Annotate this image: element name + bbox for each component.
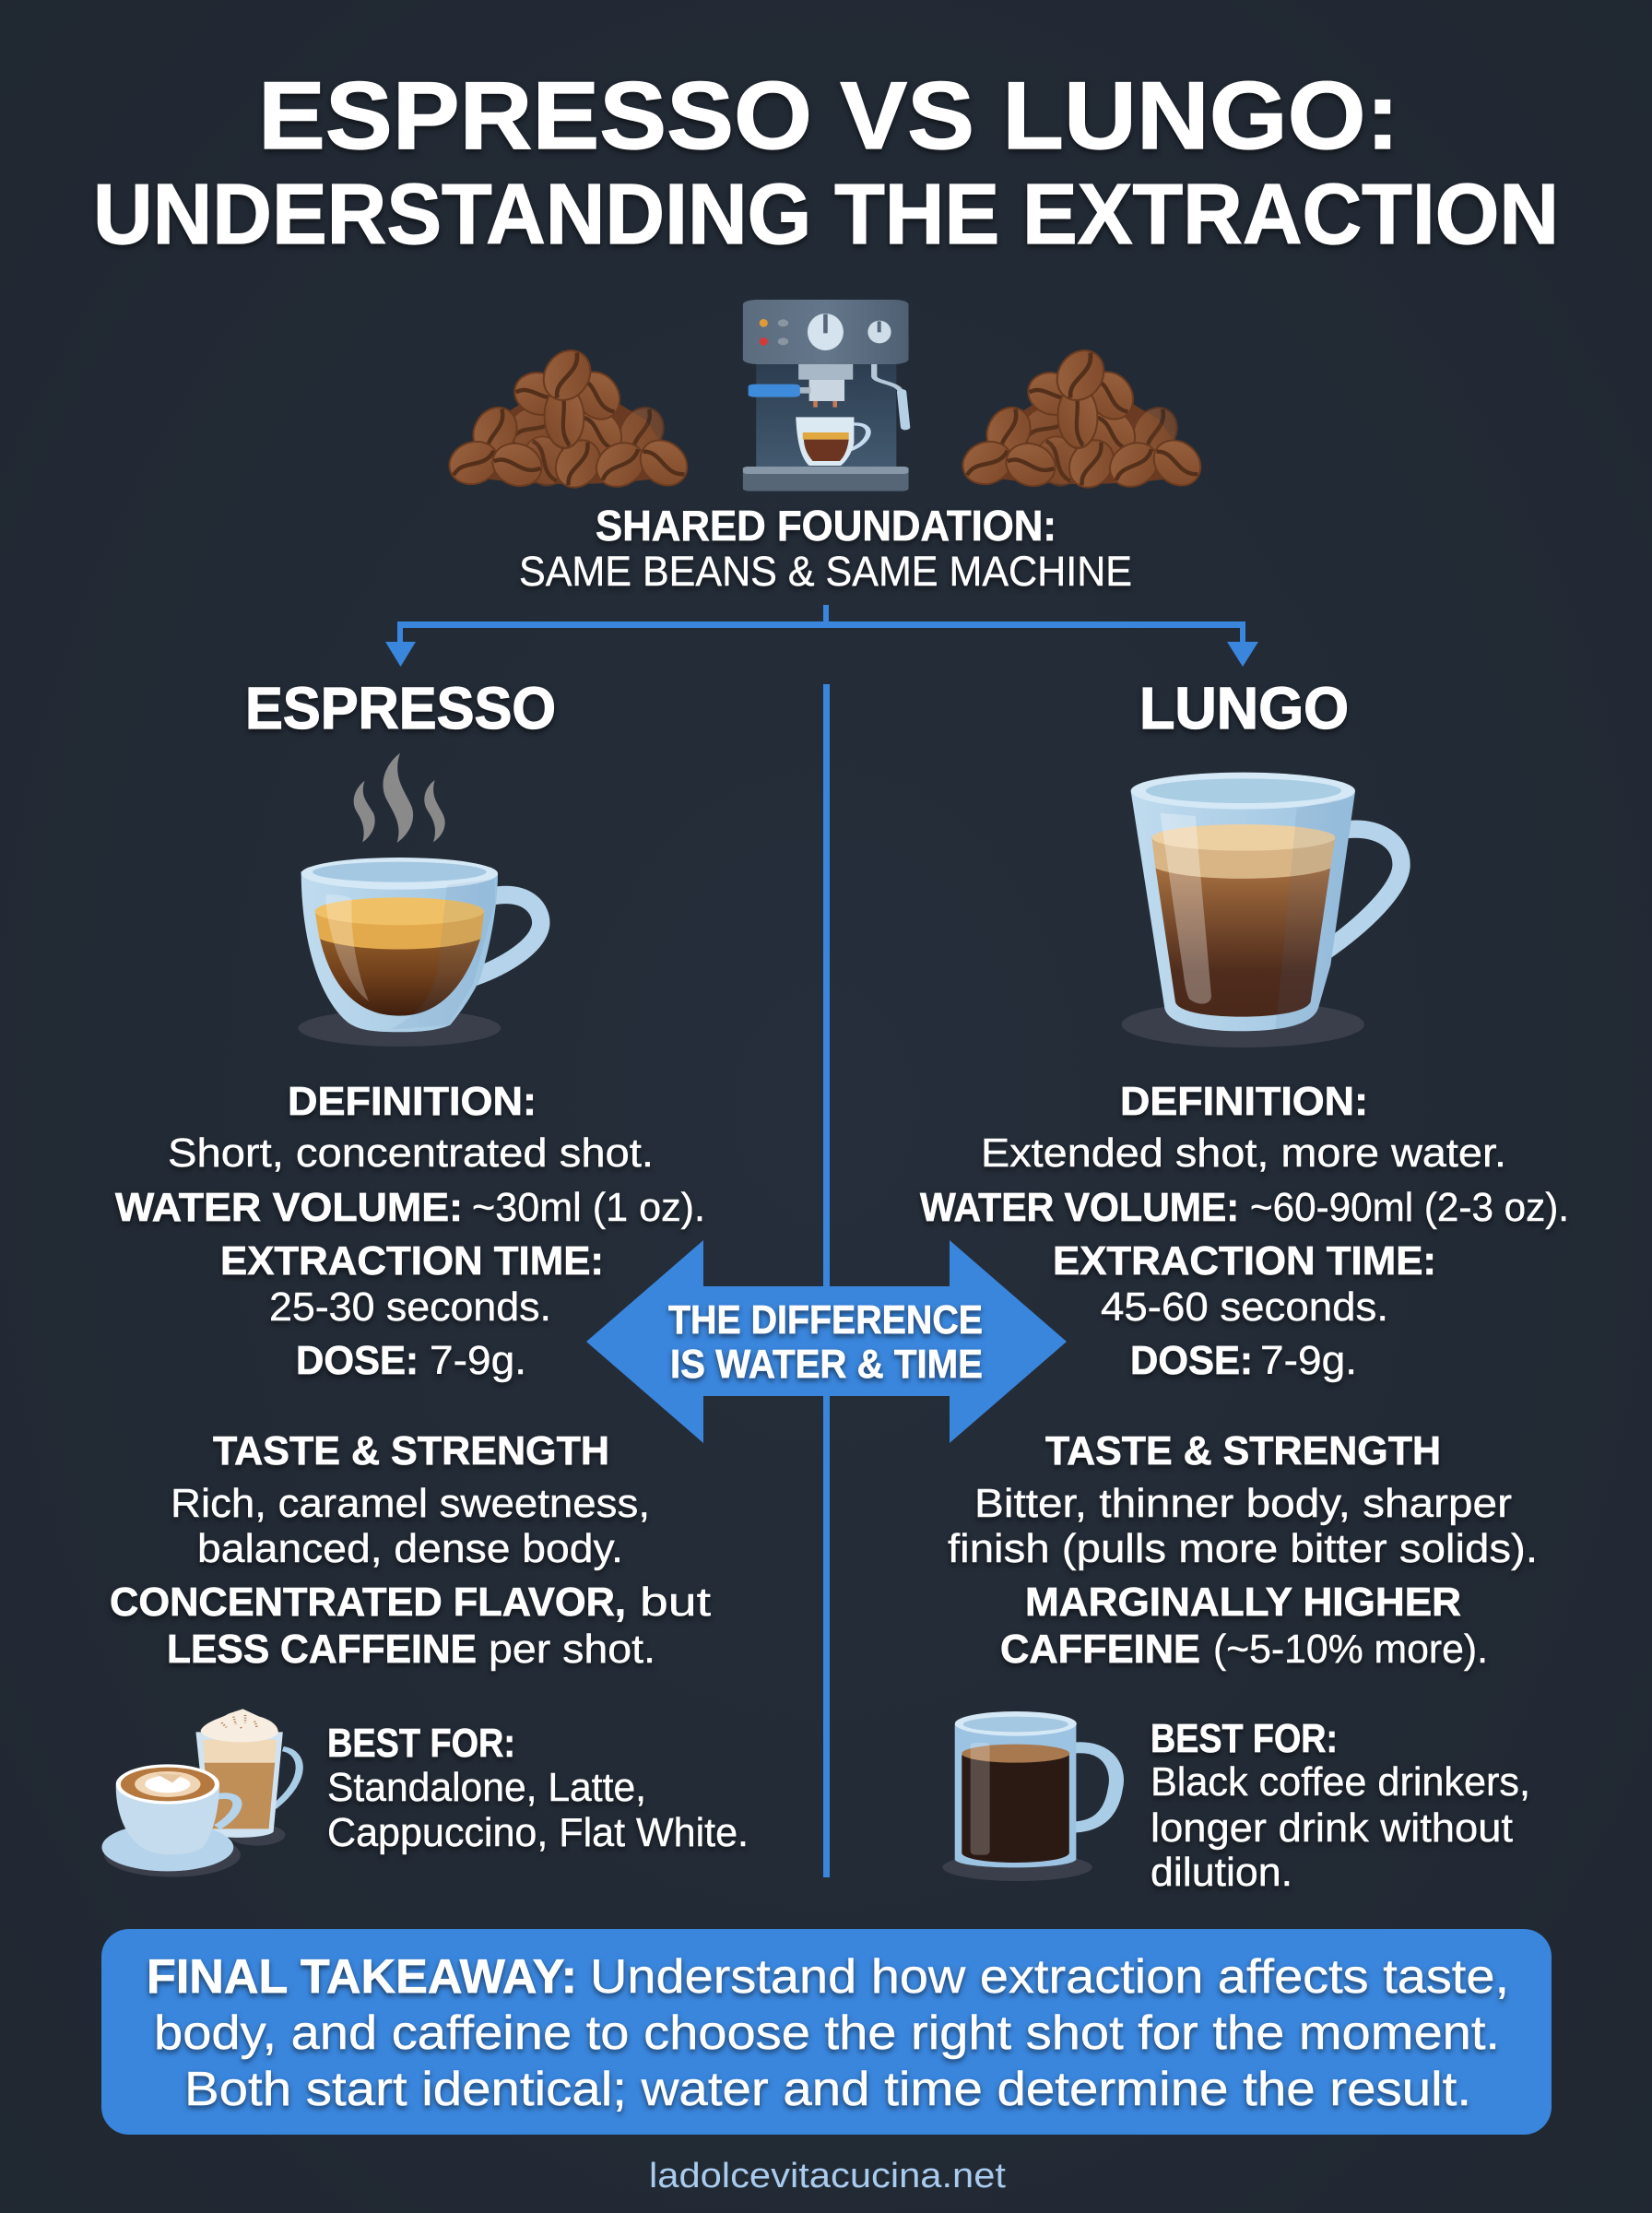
panel: lungo facts xyxy=(920,1079,1569,1672)
panel: lungo facts: MARGINALLY HIGHER xyxy=(1025,1580,1461,1625)
best for: lungo xyxy=(1150,1716,1530,1895)
panel: lungo facts: WATER VOLUME: xyxy=(920,1185,1239,1230)
panel: espresso facts: TASTE & STRENGTH xyxy=(213,1428,609,1473)
best for: lungo: longer drink without xyxy=(1150,1805,1513,1851)
arrow: the difference xyxy=(586,1240,1067,1443)
panel: lungo facts: Extended shot, more water. xyxy=(981,1130,1506,1176)
panel: espresso facts: DOSE: xyxy=(296,1338,419,1383)
panel: final takeaway: Both start identical; water and time determine the result. xyxy=(184,2063,1471,2116)
panel: lungo facts: 7-9g. xyxy=(1260,1338,1357,1383)
icon: espresso cup xyxy=(298,753,541,1047)
panel: lungo facts: EXTRACTION TIME: xyxy=(1053,1238,1436,1284)
heading: lungo: LUNGO xyxy=(1139,675,1349,741)
best for: lungo: dilution. xyxy=(1150,1850,1292,1895)
best for: espresso xyxy=(327,1721,749,1855)
arrow text: IS WATER & TIME xyxy=(670,1342,983,1387)
arrow text: THE DIFFERENCE xyxy=(668,1297,983,1343)
panel: espresso facts xyxy=(110,1079,711,1672)
icon: latte and cappuccino xyxy=(101,1709,300,1877)
panel: espresso facts: EXTRACTION TIME: xyxy=(220,1238,604,1284)
shared foundation text: SHARED FOUNDATION: xyxy=(596,502,1056,550)
best for: lungo: BEST FOR: xyxy=(1150,1716,1338,1761)
panel: lungo facts: (~5-10% more). xyxy=(1213,1627,1488,1672)
panel: final takeaway: Understand how extraction affects taste, xyxy=(590,1950,1509,2004)
best for: espresso: Cappuccino, Flat White. xyxy=(327,1810,749,1855)
best for: espresso: BEST FOR: xyxy=(327,1721,515,1766)
icon: coffee beans right xyxy=(957,341,1210,496)
icon: black coffee mug xyxy=(942,1711,1116,1881)
best for: espresso: Standalone, Latte, xyxy=(327,1765,646,1810)
panel: lungo facts: Bitter, thinner body, sharper xyxy=(974,1481,1512,1526)
panel: espresso facts: 25-30 seconds. xyxy=(269,1284,551,1330)
panel: espresso facts: but xyxy=(640,1580,711,1625)
panel: espresso facts: per shot. xyxy=(489,1627,655,1672)
arrows: split from foundation xyxy=(385,605,1258,667)
icon: espresso machine xyxy=(743,300,909,491)
shared foundation text xyxy=(519,502,1132,595)
footer: ladolcevitacucina.net xyxy=(649,2157,1006,2195)
panel: final takeaway xyxy=(101,1929,1552,2135)
panel: lungo facts: finish (pulls more bitter solids). xyxy=(948,1526,1538,1571)
icon: coffee beans left xyxy=(443,341,696,496)
panel: lungo facts: DOSE: xyxy=(1130,1338,1253,1383)
panel: espresso facts: LESS CAFFEINE xyxy=(167,1627,477,1672)
panel: espresso facts: Short, concentrated shot. xyxy=(168,1130,654,1176)
heading: espresso: ESPRESSO xyxy=(245,675,556,741)
panel: espresso facts: WATER VOLUME: xyxy=(115,1185,463,1230)
title: UNDERSTANDING THE EXTRACTION xyxy=(93,166,1559,262)
title xyxy=(93,63,1559,262)
panel: espresso facts: Rich, caramel sweetness, xyxy=(171,1481,650,1526)
panel: espresso facts: CONCENTRATED FLAVOR, xyxy=(110,1580,626,1625)
best for: lungo: Black coffee drinkers, xyxy=(1150,1759,1530,1805)
shared foundation text: SAME BEANS & SAME MACHINE xyxy=(519,548,1132,595)
center divider xyxy=(823,684,830,1877)
panel: lungo facts: CAFFEINE xyxy=(1000,1627,1200,1672)
panel: final takeaway: body, and caffeine to choose the right shot for the moment. xyxy=(154,2006,1500,2060)
panel: lungo facts: ~60-90ml (2-3 oz). xyxy=(1250,1185,1569,1230)
title: ESPRESSO VS LUNGO: xyxy=(258,63,1399,170)
icon: lungo cup xyxy=(1122,773,1401,1047)
panel: espresso facts: DEFINITION: xyxy=(288,1079,537,1124)
panel: final takeaway: FINAL TAKEAWAY: xyxy=(147,1950,577,2004)
panel: espresso facts: balanced, dense body. xyxy=(197,1526,623,1571)
panel: lungo facts: DEFINITION: xyxy=(1120,1079,1368,1124)
panel: espresso facts: ~30ml (1 oz). xyxy=(472,1185,705,1230)
panel: espresso facts: 7-9g. xyxy=(430,1338,526,1383)
panel: lungo facts: TASTE & STRENGTH xyxy=(1045,1428,1441,1473)
arrow text xyxy=(668,1297,983,1387)
panel: lungo facts: 45-60 seconds. xyxy=(1101,1284,1388,1330)
